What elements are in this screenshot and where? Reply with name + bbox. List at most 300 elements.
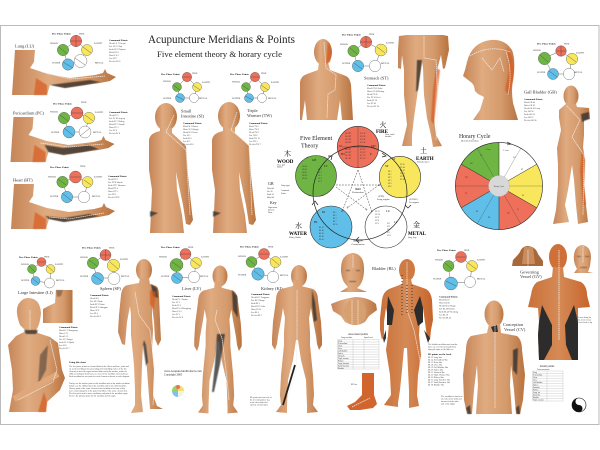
diagram: five phase points: WOOD [340,43,348,46]
diagram: five phase points: FIRE [81,101,87,104]
figure: stomach torso [300,39,353,120]
text block: bladder notes: BL 23 Kidney Shu [428,377,444,379]
command points: pericardium: Earth PC 7 Daling [109,120,124,123]
command points: stomach [367,84,386,108]
element circle: wood [296,156,336,196]
diagram: five phase points: METAL [93,131,102,134]
website and copyright: www.AcupunctureProducts.com [164,369,202,373]
command points: small intestine: Luo SI 7 [183,141,190,143]
note: governing vessel: spine from coccyx [576,318,592,322]
figure: back with spine [528,244,590,360]
command points: lung: Water LU 5 [109,55,119,57]
element circle: earth: SP [385,164,389,168]
chart: horary wheel: BL [488,217,491,219]
command points: liver: Command Points [172,295,191,298]
command points: stomach: Xi-cleft ST 34 [367,105,379,108]
command points: spleen: Command Points [90,294,109,297]
element circle: fire: PC 8 P [360,152,365,154]
heading: heart: Heart (HT) [13,178,33,182]
command points: lung: Earth LU 9 Taiyuan [109,49,126,51]
diagram: five phase points: Five Phase Points [437,249,456,252]
diagram: five phase points: WOOD [159,256,167,258]
command points: liver: Xi-cleft LV 6 [172,316,183,319]
panel: pericardium meridian [10,101,128,162]
text block: bladder notes: BL 22 Triple Warmer Shu [428,374,450,376]
command points: gall bladder: Wood GB 41 Linqi [524,107,540,110]
figure: shoulder inset [43,290,72,323]
element circle: earth: ST [392,157,396,161]
element circle: fire: SI 1 SI [360,133,366,135]
command points: small intestine: Xi-cleft SI 6 [183,143,193,146]
command points: lung [109,39,128,63]
command points: large intestine: Metal LI 1 Shangyang [59,329,78,332]
command points: heart: Earth HT 7 Shenmen [108,185,126,187]
diagram: five phase points: WOOD [80,256,88,259]
heading: liver: Liver (LV) [182,286,202,291]
diagram: five phase points: EARTH [386,42,394,44]
command points: spleen: Luo SP 4 [90,313,98,315]
command points: lung: Metal LU 8 [109,52,119,54]
diagram: five phase points: Five Phase Points [342,34,361,36]
panel: conception vessel [463,300,586,414]
key: element legend: Metal 44 [267,197,274,199]
key: element legend: Element [268,210,275,212]
command points: stomach: Fire ST 41 Jiexi [367,97,381,99]
element circle: fire: Ht 4 HT [345,142,352,144]
command points: gall bladder: Command Points [524,98,543,101]
key: element legend: Yang organ [281,184,290,187]
text block: bladder notes: inner eye over the head and down [428,346,456,348]
text block: using this chart: are used according to the generating and controlling cycles of the five [69,368,127,370]
command points: spleen: Xi-cleft SP 8 [90,315,101,318]
diagram: five phase points: EARTH [55,263,63,266]
figure: pericardium arm [10,117,114,162]
command points: small intestine: Fire SI 5 [183,135,190,137]
heading: small intestine: Small [181,108,191,114]
element label: fire: FIRE [376,130,389,135]
command points: small intestine [183,122,202,146]
diagram: five phase points: WATER [163,97,172,100]
diagram: five phase points: METAL [56,279,65,282]
figure: side face [574,245,593,273]
element circle: fire: SI 2 SI [360,136,366,138]
element circle: earth: ST 40 [400,179,405,181]
command points: liver: Water LV 8 [172,311,182,313]
diagram: five phase points: WOOD [50,42,58,45]
element label: metal: METAL [408,232,427,237]
table: alarm points: Spleen [533,384,538,386]
command points: spleen: Wood SP 1 [90,298,99,300]
diagram: five phase points: METAL [121,275,130,278]
element circle: metal: LI 2 [387,226,390,228]
text block: bladder notes: BL 18 Liver Shu [428,364,442,366]
element circle: earth: ST 41 [400,173,405,175]
title: Acupuncture Meridians & Points [148,34,295,46]
note: governing vessel: over the head to lip [576,322,592,324]
diagram: five phase points: METAL [381,62,390,65]
arrow heads: sheng cycle [312,153,411,243]
table: associated points: Pericardium [338,343,348,345]
website and copyright: Copyright 2005 [164,372,183,376]
diagram: five phase points: METAL [268,97,277,100]
command points: bladder: Luo BL 58 [439,314,448,316]
command points: triple warmer [249,122,268,146]
text block: bladder notes: BL 25 Large Intestine Shu [428,378,450,382]
command points: pericardium: Luo PC 6 [109,130,117,132]
command points: stomach: Water ST 44 Neiting [367,90,384,93]
note: bladder footnote: mirrored on the other [441,401,459,403]
command points: triple warmer: Xi-cleft TW 7 [249,143,261,146]
icon: yin yang [572,398,586,412]
text block: bladder notes: The bladder meridian runs from the [428,343,458,346]
figure: small intestine back [149,103,193,233]
element circle: earth: SP 5 [388,180,392,182]
diagram: five phase points: EARTH [477,258,485,262]
diagram: five phase points: WATER [537,71,546,74]
element circle: water: KI [322,210,325,214]
diagram: five phase points: FIRE [44,256,50,258]
table: alarm points: Gall bladder [533,382,543,384]
element circle: wood: LV 1 [318,169,322,171]
command points: spleen: Fire SP 2 Dadu [90,301,103,303]
element circle: earth: SP 9 [388,183,392,185]
figure: triple warmer back [212,102,256,233]
diagram: five phase points: METAL [92,195,101,198]
element circle: earth: SP 3 [388,177,392,179]
command points: triple warmer: Earth TW 10 [249,138,260,140]
table: alarm points: Front-mu points [537,369,550,371]
element label: earth: EARTH [416,157,434,162]
note: bladder footnote: The meridian is shown on [441,396,463,398]
diagram: five phase points: WOOD [232,80,240,84]
element circle: earth [379,156,421,198]
command points: stomach: Luo ST 40 [367,103,376,105]
element circle: wood: LV [324,164,329,168]
element label: earth: 土 [420,146,427,155]
element circle: wood: GB 34 [302,178,307,180]
element circle: fire: Ht 6 HT [345,152,352,154]
heading: spleen: Spleen (SP) [100,286,121,291]
diagram: five phase points [433,249,486,290]
diagram: five phase points: Five Phase Points [53,102,72,106]
element circle: metal: LU 8 [375,220,379,222]
command points: spleen: Earth SP 3 Taibai [90,304,105,306]
element circle: metal: LI [394,220,397,224]
table: alarm points: Lung [533,371,537,374]
figure: bladder back body [380,259,433,408]
command points: liver: Earth LV 3 [172,305,181,307]
text block: using this chart: Xi-cleft: point used in acute conditions and pain of the meridian organ [69,392,127,395]
command points: kidney: Fire KI 2 Rangu [251,299,265,302]
command points: heart: Xi-cleft HT 6 [108,196,119,199]
subheading: Meal time & meridians [461,140,479,142]
diagram: five phase points: METAL [95,62,104,64]
element circle: metal: LU 10 [375,214,380,216]
element circle: earth: ST 36 [400,176,405,178]
command points: spleen: Water SP 9 [90,310,99,312]
diagram: five phase points: FIRE [192,72,198,75]
note: kidney footnote: the foot along inner leg [250,398,269,402]
element circle: water: KI 10 [333,224,337,226]
element circle: wood: GB 43 [302,169,307,171]
label: ko: KO [355,187,361,191]
figure: heart arm [11,184,115,229]
command points: stomach: Earth ST 36 [367,100,377,102]
text block: bladder notes: BL 19 Gall Bladder Shu [428,367,448,369]
command points: large intestine: Command Points [59,326,78,329]
panel: triple warmer meridian [212,72,279,233]
element label: metal: 金 [413,220,420,229]
command points: stomach: Metal ST 45 Lidui [367,88,383,90]
note: bladder footnote: side of the figure [441,402,455,406]
chart: horary wheel: 3–5 am [503,150,509,152]
element circle: wood: LV 8 [318,181,322,183]
diagram: five phase points: Five Phase Points [19,256,38,259]
figure: front face [340,253,367,292]
element label: fire: Heart, small [385,134,395,136]
element circle: wood: GB [312,158,316,162]
heading: stomach: Stomach (ST) [364,76,389,80]
diagram: five phase points: EARTH [576,52,584,54]
command points: heart: Fire HT 8 Shaofu [108,181,123,184]
table: associated points: Heart [338,346,343,348]
text block: bladder notes: BL 20 Spleen Shu [428,370,443,372]
text block: bladder notes: BL 13 Lung Shu [428,356,442,359]
chart: horary wheel: HT [507,213,510,215]
command points: small intestine: Wood SI 3 Houxi [183,132,198,134]
command points: large intestine: Wood LI 3 [59,336,68,338]
command points: pericardium: Metal PC 5 Jianshi [109,124,125,126]
figure: large intestine torso [8,298,65,412]
command points: triple warmer: Luo TW 5 [249,141,258,143]
command points: pericardium: Command Points [109,111,128,114]
heading: large intestine: Large Intestine (LI) [18,290,53,295]
panel: governing vessel [512,244,593,360]
table: alarm points: Stomach [533,387,540,389]
element circle: water: BL 60 [319,236,324,238]
diagram: five phase points: Five Phase Points [537,42,556,46]
command points: kidney: Command Points [251,293,270,296]
diagram: five phase points: EARTH [202,81,210,84]
element label: metal [408,220,427,239]
element circle: water: KI 2 [333,215,336,217]
label: yang hollow organs: (YANG) [409,198,418,201]
heading: pericardium: Pericardium (PC) [13,110,44,116]
element circle: water [310,206,352,248]
command points: kidney: Xi-cleft KI 5 [251,314,262,317]
key: element legend: Fire 38 [267,191,272,193]
element circle: fire: Ht 5 HT [345,149,352,151]
diagram: five phase points: METAL [574,71,583,74]
table: associated points: Stomach [338,356,345,358]
figure: top view head [512,246,543,266]
command points: bladder: Metal BL 67 [439,300,450,302]
command points: bladder: Earth BL 40 Weizhong [439,310,458,314]
note: kidney footnote: to the chest under the [250,402,268,404]
diagram: five phase points: WATER [161,275,170,278]
diagram: five phase points [230,72,279,102]
command points: bladder: Water BL 66 [439,302,450,304]
element circle: earth: ST 43 [400,170,405,172]
chart: horary wheel: ST [521,169,524,171]
element label: water [289,221,307,239]
key: element legend: Organ name [268,206,277,209]
diagram: five phase points: EARTH [271,81,279,84]
command points: lung: Command Points [109,39,128,42]
text block: using this chart: Each meridian has one point for each element as shown in each diagram. [69,375,130,378]
table: alarm points: Large int. [533,391,541,394]
note: bladder footnote [441,396,463,406]
element circle: metal: LI 11 [387,235,391,237]
figure: gall bladder body [553,86,590,224]
diagram: five phase points: WOOD [21,263,29,266]
figure: lung arm [12,50,116,95]
text block: using this chart: Sedate: use the child point on the meridian and on the child meridian [69,386,126,388]
label: shen: Construction [352,243,365,246]
diagram: five phase points: FIRE [261,72,267,75]
diagram: five phase points [533,42,584,80]
text block: bladder notes: BL 27 Small Intestine Shu [428,382,450,384]
diagram: five phase points: EARTH [120,258,128,261]
key: element legend: Wood 44 [267,188,274,190]
diagram: five phase points [19,256,65,288]
diagram: five phase points [238,246,289,283]
panel: spleen meridian [80,246,163,413]
element circle: fire: HT [341,152,345,156]
element label: wood [277,149,294,168]
command points: pericardium: Xi-cleft PC 4 [109,132,120,135]
command points: heart: Command Points [108,175,127,178]
element label: water: WATER [289,232,307,237]
diagram: five phase points: Five Phase Points [82,246,101,250]
command points: liver: Metal LV 4 Zhongfeng [172,307,191,310]
element circle: fire: TW [371,144,376,148]
command points: large intestine: Xi-cleft LI 7 [59,347,70,350]
label: foot: KI Foot [351,384,357,386]
table: alarm points: Bladder [533,397,539,399]
command points: liver [172,295,191,319]
element circle: earth: SP 1 [388,171,392,173]
chart: horary wheel: LU [513,157,516,159]
command points: liver: Fire LV 2 [172,302,180,304]
element circle: metal: LU 9 [375,217,379,219]
note: bladder footnote: one side of the body and [441,398,462,400]
element circle: fire: SI 3 SI [360,139,366,141]
command points: gall bladder: Luo GB 37 [524,117,533,119]
diagram: five phase points [80,246,130,284]
command points: large intestine: Water LI 2 [59,333,68,335]
diagram: five phase points: WATER [21,279,30,282]
heading: conception vessel: Vessel (CV) [504,327,526,332]
diagram: five phase points [50,32,104,70]
diagram: five phase points [48,165,102,203]
text block: using this chart: Horary: point of the same element as the meridian at its time of day [69,387,126,390]
element circle: wood: LV 3 [318,175,322,177]
element circle: water: BL 40 [319,239,324,241]
command points: gall bladder: Xi-cleft GB 36 [524,119,536,122]
key: element legend: Points [281,193,286,195]
command points: lung: Xi-cleft LU 6 [109,60,120,63]
figure: liver front body [194,266,242,413]
table: alarm points: Heart [533,377,538,379]
command points: heart: Water HT 3 [108,191,118,193]
text block: bladder notes: BL 21 Stomach Shu [428,372,445,374]
diagram: five phase points: METAL [477,278,486,280]
element circle: metal: LI 5 [387,232,390,234]
label: yin long organs: Long organs [377,198,390,201]
diagram: five phase points: FIRE [564,42,570,46]
command points: bladder: Command Points [439,296,458,298]
command points: gall bladder: Fire GB 38 [524,111,533,113]
text block: using this chart: Using this chart [69,361,86,364]
heading: five element theory: Five Element [300,136,332,142]
command points: triple warmer: Fire TW 6 [249,135,258,137]
table: alarm points: Kidney [533,390,539,392]
element label: water: 水 [295,221,302,230]
command points: triple warmer: Command Points [249,122,268,125]
key: element legend: Command [281,190,289,192]
text block: using this chart [69,361,130,398]
text block: bladder notes: BL points on the back [428,353,452,356]
note: kidney footnote: clavicle on both sides [250,404,268,406]
element circle: wood: GB 38 [302,175,307,177]
element label: wood: bladder [277,166,283,168]
element label: fire: 火 [380,120,386,129]
label: shen: SHEN [353,238,363,242]
element circle: water: KI 7 [333,221,336,223]
chart: horary wheel: PC [465,193,468,195]
element circle: earth: SP 6 [388,186,392,188]
element circle: metal: LU [386,209,391,213]
command points: small intestine: Metal SI 1 Shaoze [183,126,198,128]
command points: lung: Wood LU 11 Jueyin [109,43,126,45]
element circle: metal: LU 11 [375,211,380,213]
table: alarm points [532,365,563,402]
table: alarm points: Liver [533,380,537,382]
key: element legend: Earth 34 [267,194,274,196]
chart: horary wheel: LV [480,155,483,157]
element label: water: Kidney, bladder [289,237,301,239]
element label: fire [376,120,395,138]
text block: bladder notes: along the spine to the little toe. [428,348,454,351]
element circle: fire: SI 5 SI [360,142,366,144]
table: associated points: Liver [338,348,342,350]
diagram: five phase points: Five Phase Points [52,32,71,36]
element label: wood: Liver, gall [277,164,285,166]
label: yang hollow organs: Fu organs [409,201,419,204]
command points: heart: Luo HT 5 [108,194,116,196]
command points: gall bladder [524,98,543,122]
note: kidney footnote [250,396,272,406]
diagram: five phase points: Five Phase Points [230,73,249,76]
command points: large intestine: Luo LI 6 [59,345,66,347]
command points: stomach: Command Points [367,84,386,87]
diagram: five phase points: Five Phase Points [161,246,180,249]
logo: small five element [172,385,184,397]
panel: lung meridian [12,32,128,95]
panel: large intestine meridian [8,256,130,412]
command points: gall bladder: Metal GB 44 [524,102,535,104]
diagram: five phase points: WATER [342,62,351,65]
command points: liver: Wood LV 1 Dadun [172,299,188,301]
diagram: five phase points: METAL [199,97,208,100]
diagram: five phase points: FIRE [188,246,194,249]
diagram: five phase points: EARTH [201,256,209,258]
diagram: five phase points [340,33,394,72]
table: associated points: Spleen [338,353,343,355]
heading: kidney: Kidney (KI) [261,286,283,291]
element circle: fire: P [370,152,372,156]
